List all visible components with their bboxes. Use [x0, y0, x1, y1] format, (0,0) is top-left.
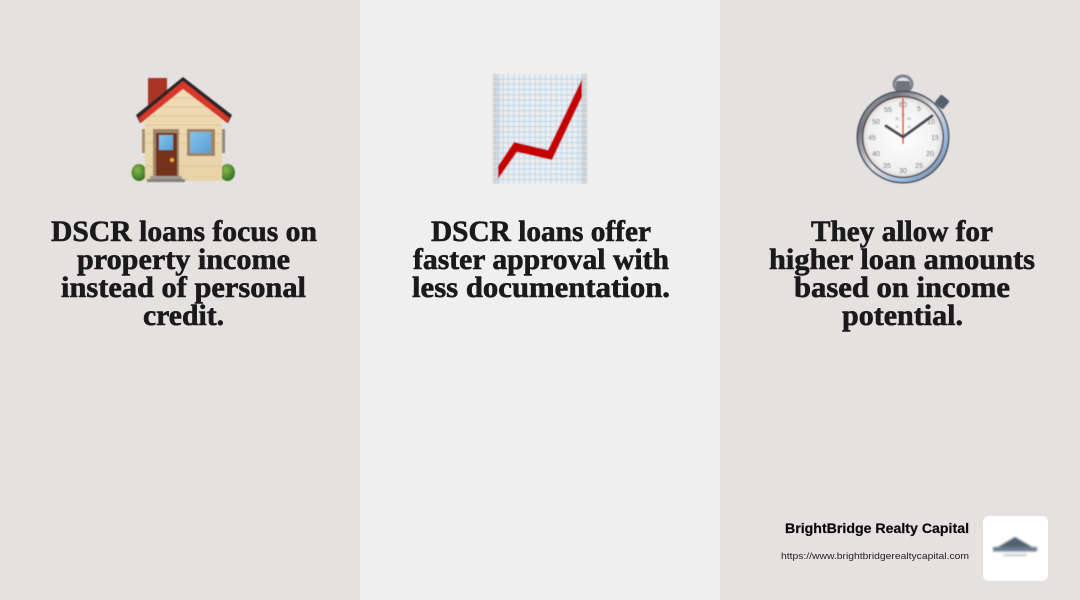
icon: rising chart — [493, 74, 587, 184]
icon: stopwatch: 25 — [895, 117, 899, 121]
heading: middle panel: DSCR loans offer — [431, 215, 651, 248]
icon: stopwatch: 30 — [901, 113, 905, 117]
icon: stopwatch: 45 — [868, 135, 876, 142]
icon: stopwatch: 40 — [872, 151, 880, 158]
heading: right panel: potential. — [842, 299, 963, 332]
heading: left panel — [51, 215, 317, 332]
icon: stopwatch — [856, 76, 950, 184]
brand name: BrightBridge Realty Capital — [785, 521, 969, 536]
icon: stopwatch: 20 — [895, 125, 899, 129]
icon: stopwatch: 10 — [927, 119, 935, 126]
heading: right panel: They allow for — [811, 215, 993, 248]
icon: stopwatch: 25 — [915, 163, 923, 170]
heading: middle panel: faster approval with — [413, 243, 669, 276]
heading: left panel: DSCR loans focus on — [51, 215, 317, 248]
panel: middle background — [360, 0, 720, 600]
icon: stopwatch: 60 — [899, 102, 907, 109]
icon: stopwatch: 05 — [907, 117, 911, 121]
icon: stopwatch: 5 — [917, 106, 921, 113]
logo card — [983, 516, 1048, 581]
icon: stopwatch: 15 — [931, 135, 939, 142]
heading: left panel: property income — [77, 243, 290, 276]
heading: right panel — [769, 215, 1035, 332]
icon: stopwatch: 10 — [907, 125, 911, 129]
heading: left panel: credit. — [143, 299, 224, 332]
icon: stopwatch: 35 — [883, 163, 891, 170]
icon: stopwatch: 50 — [872, 119, 880, 126]
heading: right panel: higher loan amounts — [769, 243, 1035, 276]
icon: house — [132, 77, 235, 182]
panel: left background — [0, 0, 360, 600]
heading: middle panel — [412, 215, 670, 304]
website url: https://www.brightbridgerealtycapital.com — [781, 551, 969, 562]
heading: right panel: based on income — [794, 271, 1010, 304]
heading: middle panel: less documentation. — [412, 271, 670, 304]
panel: right background — [720, 0, 1080, 600]
icon: stopwatch: 30 — [899, 168, 907, 175]
icon: stopwatch: 55 — [884, 107, 892, 114]
heading: left panel: instead of personal — [61, 271, 306, 304]
icon: stopwatch: 20 — [926, 151, 934, 158]
